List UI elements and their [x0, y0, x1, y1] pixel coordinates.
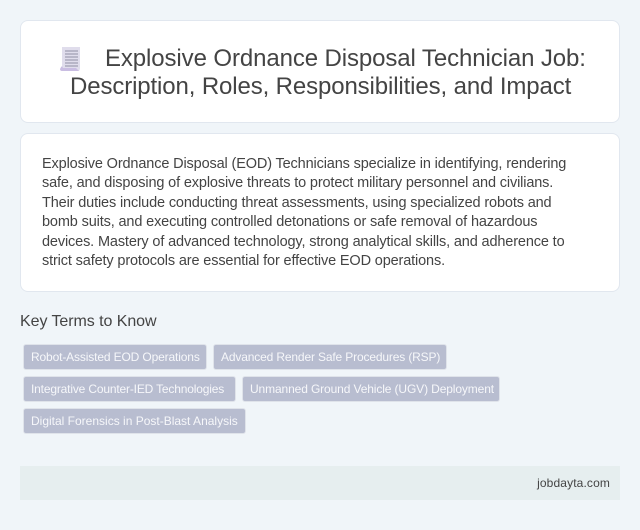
- icon: paper scroll: [60, 47, 80, 71]
- tag: Unmanned Ground Vehicle (UGV) Deployment: [250, 382, 494, 396]
- tag: [242, 376, 500, 402]
- title: Description, Roles, Responsibilities, and Impact: [70, 73, 571, 100]
- tag: [23, 376, 236, 402]
- description text: bomb suits, and executing controlled detonations or safe removal of hazardous: [42, 214, 537, 230]
- description text: Explosive Ordnance Disposal (EOD) Technicians specialize in identifying, rendering: [42, 156, 566, 172]
- title: [70, 45, 586, 100]
- tag: Robot-Assisted EOD Operations: [31, 350, 200, 364]
- description text: Their duties include conducting threat assessments, using specialized robots and: [42, 195, 551, 211]
- description text: strict safety protocols are essential for effective EOD operations.: [42, 253, 445, 269]
- footer source: jobdayta.com: [537, 476, 610, 490]
- tag: [213, 344, 447, 370]
- tag: Integrative Counter-IED Technologies: [31, 382, 224, 396]
- panel: description card: [20, 133, 620, 292]
- tag: Digital Forensics in Post-Blast Analysis: [31, 414, 238, 428]
- tag: [23, 344, 207, 370]
- description text: devices. Mastery of advanced technology, strong analytical skills, and adherence to: [42, 234, 564, 250]
- tag: [23, 408, 246, 434]
- title: Explosive Ordnance Disposal Technician Job:: [105, 45, 586, 72]
- description text: safe, and disposing of explosive threats to protect military personnel and civilians.: [42, 175, 553, 191]
- tag: Advanced Render Safe Procedures (RSP): [221, 350, 440, 364]
- footer bar: [20, 466, 620, 500]
- heading: key terms: Key Terms to Know: [20, 313, 157, 330]
- tag list: [23, 344, 500, 434]
- description text: [42, 156, 566, 269]
- panel: title card: [20, 20, 620, 123]
